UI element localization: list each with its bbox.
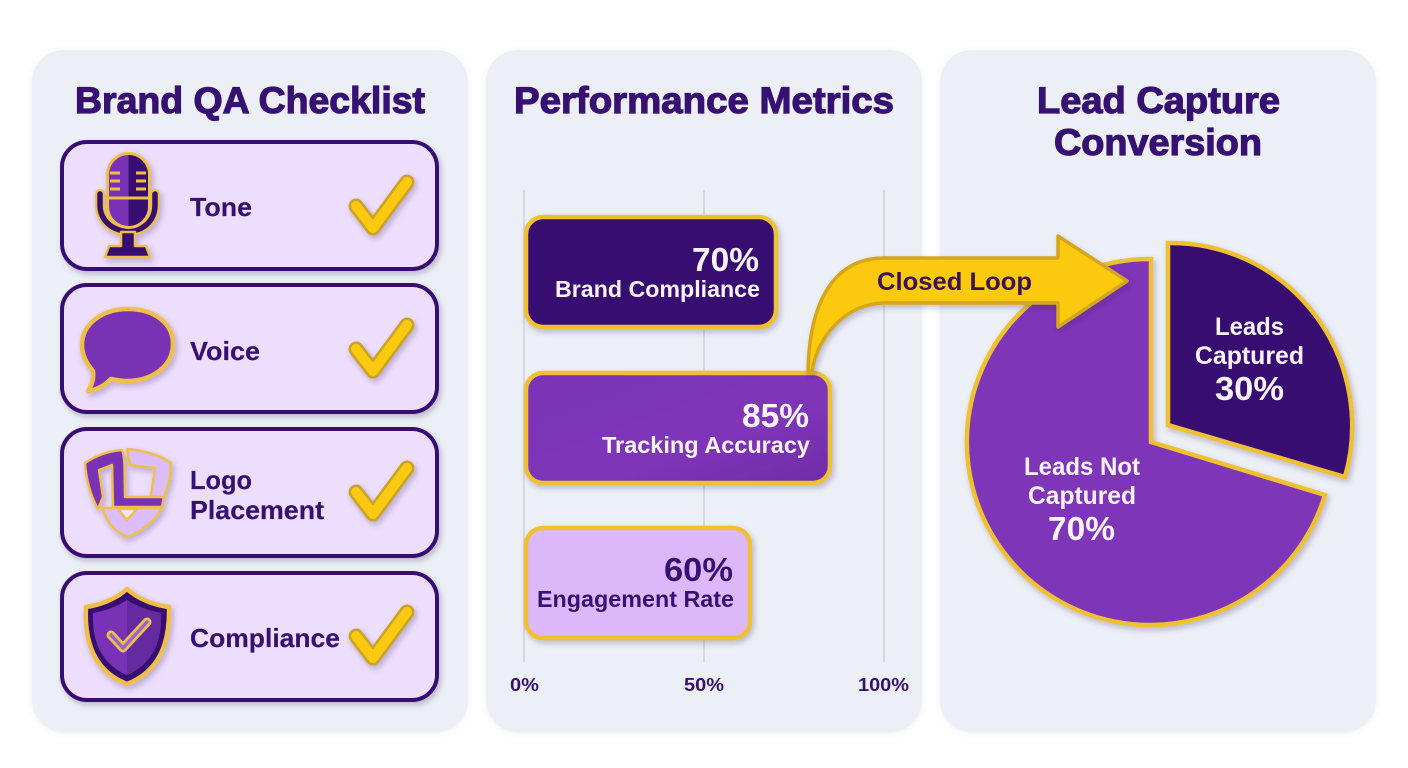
checklist card: Logo Placement xyxy=(62,429,437,556)
axis labels: 100% xyxy=(858,675,909,695)
icon: microphone xyxy=(100,154,155,257)
label: Logo Placement: Logo xyxy=(190,465,252,495)
checklist card: Logo Placement: Placement xyxy=(190,495,324,525)
axis labels: 0% xyxy=(510,675,539,695)
arrow: closed loop xyxy=(808,236,1127,372)
heading: Lead Capture Conversion: Conversion xyxy=(1054,122,1262,163)
pie slice: leads not captured 70%: Captured xyxy=(1028,482,1136,510)
icon: check mark xyxy=(356,468,407,514)
checklist card: Voice xyxy=(62,285,437,412)
bar: Tracking Accuracy 85%: Tracking Accuracy xyxy=(602,432,810,458)
pie slice: leads captured 30%: 30% xyxy=(1215,370,1284,407)
heading: Lead Capture Conversion: Lead Capture xyxy=(1037,80,1280,121)
panel: lead capture conversion xyxy=(940,50,1376,732)
bar: Tracking Accuracy 85% xyxy=(526,373,830,483)
label: Voice: Voice xyxy=(190,336,260,366)
pie slice: leads not captured 70% xyxy=(967,259,1325,625)
label: Tone: Tone xyxy=(190,192,252,222)
pie slice: leads not captured 70%: Leads Not xyxy=(1024,453,1141,481)
icon: compliance shield xyxy=(86,589,169,684)
axis labels xyxy=(510,675,909,695)
bar: Brand Compliance 70%: Brand Compliance xyxy=(555,276,760,302)
bar: Engagement Rate 60% xyxy=(526,528,750,638)
bar: Brand Compliance 70% xyxy=(526,217,776,327)
icon: speech bubble xyxy=(82,309,173,391)
pie slice: leads captured 30% xyxy=(1168,243,1352,477)
bar: Brand Compliance 70%: 70% xyxy=(692,241,759,278)
label: Compliance: Compliance xyxy=(190,623,340,653)
checklist card: Tone xyxy=(62,142,437,269)
bar: Tracking Accuracy 85%: 85% xyxy=(742,397,809,434)
icon: logo shield xyxy=(85,449,171,537)
checklist card: Compliance xyxy=(62,573,437,700)
heading: Performance Metrics: Performance Metrics xyxy=(514,80,894,121)
panel: performance metrics xyxy=(486,50,922,732)
arrow: closed loop: Closed Loop xyxy=(877,268,1032,296)
icon: check mark xyxy=(356,182,407,228)
icon: check mark xyxy=(356,325,407,371)
heading: Brand QA Checklist: Brand QA Checklist xyxy=(75,80,425,121)
bar: Engagement Rate 60%: Engagement Rate xyxy=(537,586,734,612)
pie slice: leads not captured 70%: 70% xyxy=(1048,510,1115,547)
bar: Engagement Rate 60%: 60% xyxy=(664,551,733,588)
panel: brand QA checklist xyxy=(32,50,468,732)
axis labels: 50% xyxy=(684,675,724,695)
icon: check mark xyxy=(356,612,407,658)
pie slice: leads captured 30%: Leads xyxy=(1215,313,1284,341)
pie slice: leads captured 30%: Captured xyxy=(1195,342,1304,370)
heading: Lead Capture Conversion xyxy=(1037,80,1280,163)
